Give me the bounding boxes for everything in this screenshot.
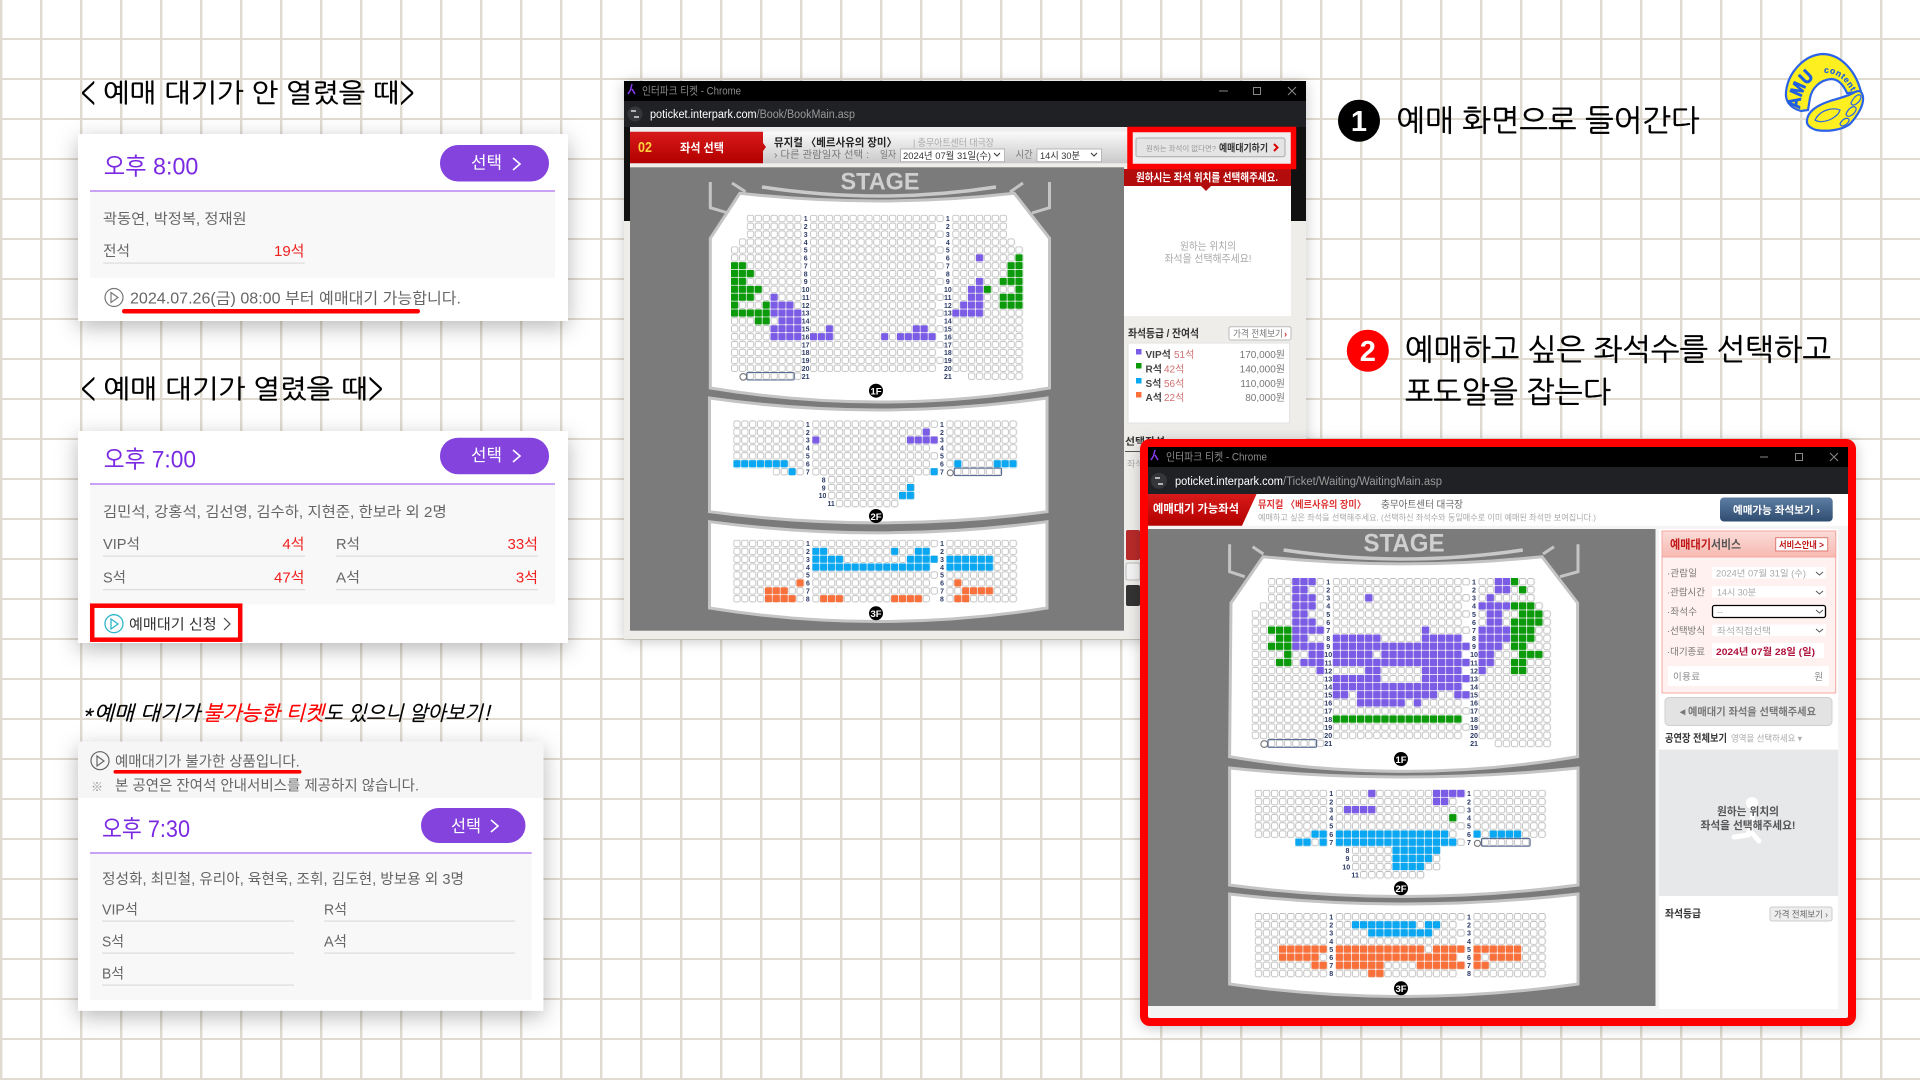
red highlight box: waitlist apply bbox=[92, 606, 240, 640]
reference mark note: 본 공연은 잔여석 안내서비스를 제공하지 않습니다. bbox=[115, 778, 419, 795]
side panel: seat grades and remaining seats: VIP석 bbox=[1146, 348, 1171, 361]
header: seat selection step bbox=[630, 132, 1133, 163]
time label: 오후 7:00 bbox=[104, 446, 196, 473]
header: seat selection step: 좌석 선택 bbox=[680, 141, 724, 155]
step 1 badge: 1 bbox=[1351, 106, 1367, 138]
seat map: floor 2 bbox=[710, 398, 1047, 523]
side panel: waitlist service form: 예매대기 bbox=[1670, 536, 1711, 552]
window title bar bbox=[1148, 447, 1848, 467]
seat map: floor 1 bbox=[710, 193, 1050, 402]
header: seat selection step: › 다른 관람일자 선택 : bbox=[774, 148, 869, 161]
seat map background bbox=[630, 167, 1124, 631]
window title bar: 인터파크 티켓 - Chrome bbox=[642, 85, 741, 98]
side panel: seat grades and remaining seats: 170,000원 bbox=[1240, 349, 1285, 361]
play icon bbox=[105, 288, 123, 306]
seat count grid: 3석 bbox=[516, 570, 538, 586]
header: seat selection step: 2024년 07월 31일(수) bbox=[903, 150, 991, 162]
side panel: waitlist service form: 이용료 bbox=[1673, 672, 1700, 683]
side panel: waitlist service form: ·관람일 bbox=[1667, 568, 1697, 580]
note: some tickets cannot be waitlisted: *예매 대기가 bbox=[81, 703, 202, 723]
gray prompt button: ◂ 예매대기 좌석을 선택해주세요 bbox=[1679, 705, 1816, 718]
seat grade rows: A석 bbox=[324, 933, 347, 950]
step 2 text: 포도알을 잡는다 bbox=[1405, 376, 1611, 408]
logo: AMU content: AMU bbox=[1787, 68, 1812, 110]
seat map: floor 2: 2F bbox=[870, 512, 882, 523]
address bar: poticket.interpark.com bbox=[1175, 476, 1283, 488]
heading: when the waitlist is not open: < 예매 대기가 안 열렸을 때> bbox=[80, 80, 415, 106]
venue overview: 원하는 위치의 bbox=[1717, 804, 1779, 818]
side panel: waitlist service form: -- bbox=[1717, 607, 1723, 617]
seat map: floor 3: 3F bbox=[870, 609, 882, 620]
side panel: seat grades and remaining seats: 22석 bbox=[1164, 392, 1184, 404]
seat count row bbox=[103, 243, 305, 264]
side panel: seat guidance: 원하는 위치의 bbox=[1180, 240, 1236, 252]
seat count grid: S석 bbox=[103, 570, 126, 586]
header band: 예매가능 좌석보기 › bbox=[1733, 504, 1820, 516]
seat count grid: A석 bbox=[336, 570, 360, 586]
side panel: waitlist service form bbox=[1659, 529, 1838, 1009]
seat count grid: R석 bbox=[336, 536, 360, 553]
seat map: floor 2: 2F bbox=[1395, 884, 1407, 895]
venue overview: 공연장 전체보기 bbox=[1665, 732, 1727, 744]
note: some tickets cannot be waitlisted: 불가능한 티켓 bbox=[203, 703, 326, 723]
side panel: seat grades and remaining seats: 가격 전체보기 bbox=[1233, 328, 1283, 340]
side panel: seat guidance: 원하시는 좌석 위치를 선택해주세요. bbox=[1136, 170, 1278, 184]
stage bbox=[1230, 530, 1578, 577]
seat map: floor 3 bbox=[710, 522, 1047, 622]
side panel: waitlist service form: 14시 30분 bbox=[1717, 588, 1756, 598]
seat grade heading bbox=[1665, 907, 1832, 921]
header: seat selection step: 뮤지컬 〈베르사유의 장미〉 bbox=[774, 136, 897, 149]
step 2 text bbox=[1405, 335, 1831, 408]
header: seat selection step: 시간 bbox=[1016, 149, 1033, 161]
reference mark note: ※ bbox=[91, 780, 103, 794]
seat map background bbox=[1148, 529, 1656, 1006]
window title bar: 인터파크 티켓 - Chrome bbox=[1166, 451, 1267, 464]
panel: booking window screenshot bbox=[624, 81, 1306, 639]
red highlight: waitlist button: 예매대기하기 bbox=[1219, 142, 1268, 154]
side panel: waitlist service form: 원 bbox=[1814, 672, 1823, 683]
cast list: 정성화, 최민철, 유리아, 육현욱, 조휘, 김도현, 방보용 외 3명 bbox=[102, 871, 464, 888]
cast list: 김민석, 강홍석, 김선영, 김수하, 지현준, 한보라 외 2명 bbox=[103, 504, 447, 521]
venue overview: 좌석을 선택해주세요! bbox=[1700, 819, 1796, 832]
note: some tickets cannot be waitlisted: 도 있으니 알아보기! bbox=[324, 703, 491, 723]
address bar: /Ticket/Waiting/WaitingMain.asp bbox=[1283, 476, 1442, 488]
play icon bbox=[91, 752, 109, 770]
time label: 오후 7:30 bbox=[102, 816, 190, 843]
side panel: seat grades and remaining seats: 42석 bbox=[1164, 364, 1184, 376]
side panel: partially hidden controls: 좌석 bbox=[1127, 459, 1144, 469]
side panel: waitlist service form: 2024년 07월 31일 (수) bbox=[1716, 568, 1806, 578]
side panel: seat grades and remaining seats: 80,000원 bbox=[1245, 392, 1285, 404]
stage bbox=[710, 168, 1050, 213]
side panel: seat grades and remaining seats: R석 bbox=[1146, 363, 1162, 376]
red underline bbox=[114, 770, 302, 774]
step 2 badge bbox=[1347, 330, 1389, 372]
stage: STAGE bbox=[1364, 530, 1444, 558]
header band: 뮤지컬 〈베르사유의 장미〉 bbox=[1258, 498, 1366, 511]
side panel: seat grades and remaining seats: S석 bbox=[1146, 377, 1161, 390]
waitlist open date notice: 2024.07.26(금) 08:00 부터 예매대기 가능합니다. bbox=[130, 289, 461, 307]
seat map: floor 1 bbox=[1230, 557, 1578, 771]
venue overview bbox=[1659, 732, 1838, 896]
header band: 충무아트센터 대극장 bbox=[1381, 499, 1463, 511]
side panel: waitlist service form: 서비스 bbox=[1711, 538, 1741, 552]
address bar bbox=[1148, 467, 1848, 494]
side panel: seat grades and remaining seats: 51석 bbox=[1174, 349, 1194, 361]
select button bbox=[440, 145, 549, 182]
seat count row: 전석 bbox=[103, 243, 130, 260]
select button: 선택 bbox=[471, 446, 502, 465]
side panel: waitlist service form: ·선택방식 bbox=[1667, 626, 1705, 637]
side panel: waitlist service form: 서비스안내 > bbox=[1779, 539, 1824, 550]
step 2 text: 예매하고 싶은 좌석수를 선택하고 bbox=[1405, 335, 1831, 365]
step 2 badge: 2 bbox=[1360, 336, 1376, 368]
header: seat selection step: 일자 bbox=[880, 149, 896, 161]
seat map: floor 2 bbox=[1230, 768, 1578, 896]
address bar: /Book/BookMain.asp bbox=[757, 109, 855, 121]
side panel: seat grades and remaining seats bbox=[1128, 326, 1291, 423]
side panel: partially hidden controls: 선택좌석 bbox=[1125, 435, 1165, 448]
panel: waiting list window screenshot bbox=[1144, 443, 1852, 1022]
panel: performance card 8:00 bbox=[78, 134, 568, 321]
heading: when the waitlist is open: < 예매 대기가 열렸을 때> bbox=[80, 376, 384, 402]
logo: AMU content: content bbox=[1824, 68, 1856, 92]
side panel: seat grades and remaining seats: 140,000원 bbox=[1240, 364, 1285, 376]
time label: 오후 8:00 bbox=[104, 154, 198, 181]
gray prompt button bbox=[1665, 698, 1832, 726]
side panel: waitlist service form: ·대기종료 bbox=[1667, 647, 1705, 658]
seat grade rows: B석 bbox=[102, 965, 124, 982]
cast list: 곽동연, 박정복, 정재원 bbox=[103, 211, 247, 228]
side panel: seat grades and remaining seats: › bbox=[1284, 329, 1287, 340]
red highlight: waitlist button bbox=[1130, 130, 1294, 166]
seat map: floor 1: 1F bbox=[870, 386, 882, 398]
seat map: floor 3: 3F bbox=[1395, 984, 1407, 995]
side panel: waitlist service form: 좌석직접선택 bbox=[1717, 625, 1771, 636]
select button bbox=[440, 438, 549, 474]
logo: AMU content bbox=[1784, 52, 1864, 132]
seat grade rows: R석 bbox=[324, 901, 347, 918]
side panel: waitlist service form: ·관람시간 bbox=[1667, 586, 1705, 598]
header band bbox=[1148, 494, 1848, 526]
seat grade heading: 좌석등급 bbox=[1665, 907, 1701, 920]
header band: 예매대기 가능좌석 bbox=[1153, 502, 1239, 516]
window title bar bbox=[624, 81, 1306, 101]
side panel: seat grades and remaining seats: 좌석등급 / 잔여석 bbox=[1128, 326, 1199, 340]
select button bbox=[421, 808, 526, 843]
seat map: floor 3 bbox=[1230, 894, 1578, 996]
stage: STAGE bbox=[840, 168, 920, 196]
seat count grid: VIP석 bbox=[103, 536, 140, 553]
seat grade rows: S석 bbox=[102, 933, 124, 950]
side panel: seat guidance: 좌석을 선택해주세요! bbox=[1164, 252, 1252, 265]
not available notice: 예매대기가 불가한 상품입니다. bbox=[115, 754, 300, 770]
seat grade heading: 가격 전체보기 › bbox=[1774, 908, 1828, 920]
seat count grid: 47석 bbox=[274, 570, 304, 586]
address bar bbox=[624, 101, 1306, 127]
side panel: seat guidance bbox=[1124, 169, 1291, 316]
side panel: seat grades and remaining seats: 56석 bbox=[1164, 378, 1184, 390]
seat map: floor 1: 1F bbox=[1395, 755, 1407, 766]
header: seat selection step: 14시 30분 bbox=[1040, 151, 1080, 162]
side panel: seat grades and remaining seats: A석 bbox=[1146, 391, 1162, 404]
red underline bbox=[122, 309, 420, 314]
select button: 선택 bbox=[451, 817, 481, 836]
side panel: seat grades and remaining seats: 110,000원 bbox=[1240, 378, 1285, 390]
side panel: waitlist service form: 2024년 07월 28일 (일) bbox=[1716, 646, 1815, 658]
header: seat selection step: 02 bbox=[638, 139, 652, 156]
seat count grid: 33석 bbox=[508, 536, 538, 553]
address bar: poticket.interpark.com bbox=[650, 109, 757, 121]
note: some tickets cannot be waitlisted bbox=[81, 703, 491, 723]
seat count row: 19석 bbox=[274, 243, 304, 260]
header band: 예매하고 싶은 좌석을 선택해주세요. (선택하신 좌석수와 동일매수로 이미 예매된 좌석만 보여집니다.) bbox=[1258, 513, 1596, 523]
seat grade rows bbox=[102, 901, 515, 986]
panel: performance card 7:00 bbox=[78, 431, 568, 643]
select button: 선택 bbox=[471, 154, 502, 173]
header: seat selection step: | 충무아트센터 대극장 bbox=[913, 138, 994, 149]
red highlight: waitlist button: 원하는 좌석이 없다면? bbox=[1146, 143, 1216, 153]
step 1 text: 예매 화면으로 들어간다 bbox=[1396, 106, 1700, 136]
side panel: waitlist service form: ·좌석수 bbox=[1667, 607, 1697, 618]
red highlight box: waitlist apply: 예매대기 신청 bbox=[129, 616, 217, 634]
seat count grid bbox=[103, 536, 538, 590]
step 1 badge bbox=[1338, 100, 1380, 142]
side panel: partially hidden controls bbox=[1125, 435, 1291, 606]
seat count grid: 4석 bbox=[282, 536, 304, 553]
panel: performance card 7:30 (not available) bbox=[78, 742, 543, 1011]
seat grade rows: VIP석 bbox=[102, 901, 138, 918]
venue overview: 영역을 선택하세요 ▾ bbox=[1731, 734, 1802, 744]
